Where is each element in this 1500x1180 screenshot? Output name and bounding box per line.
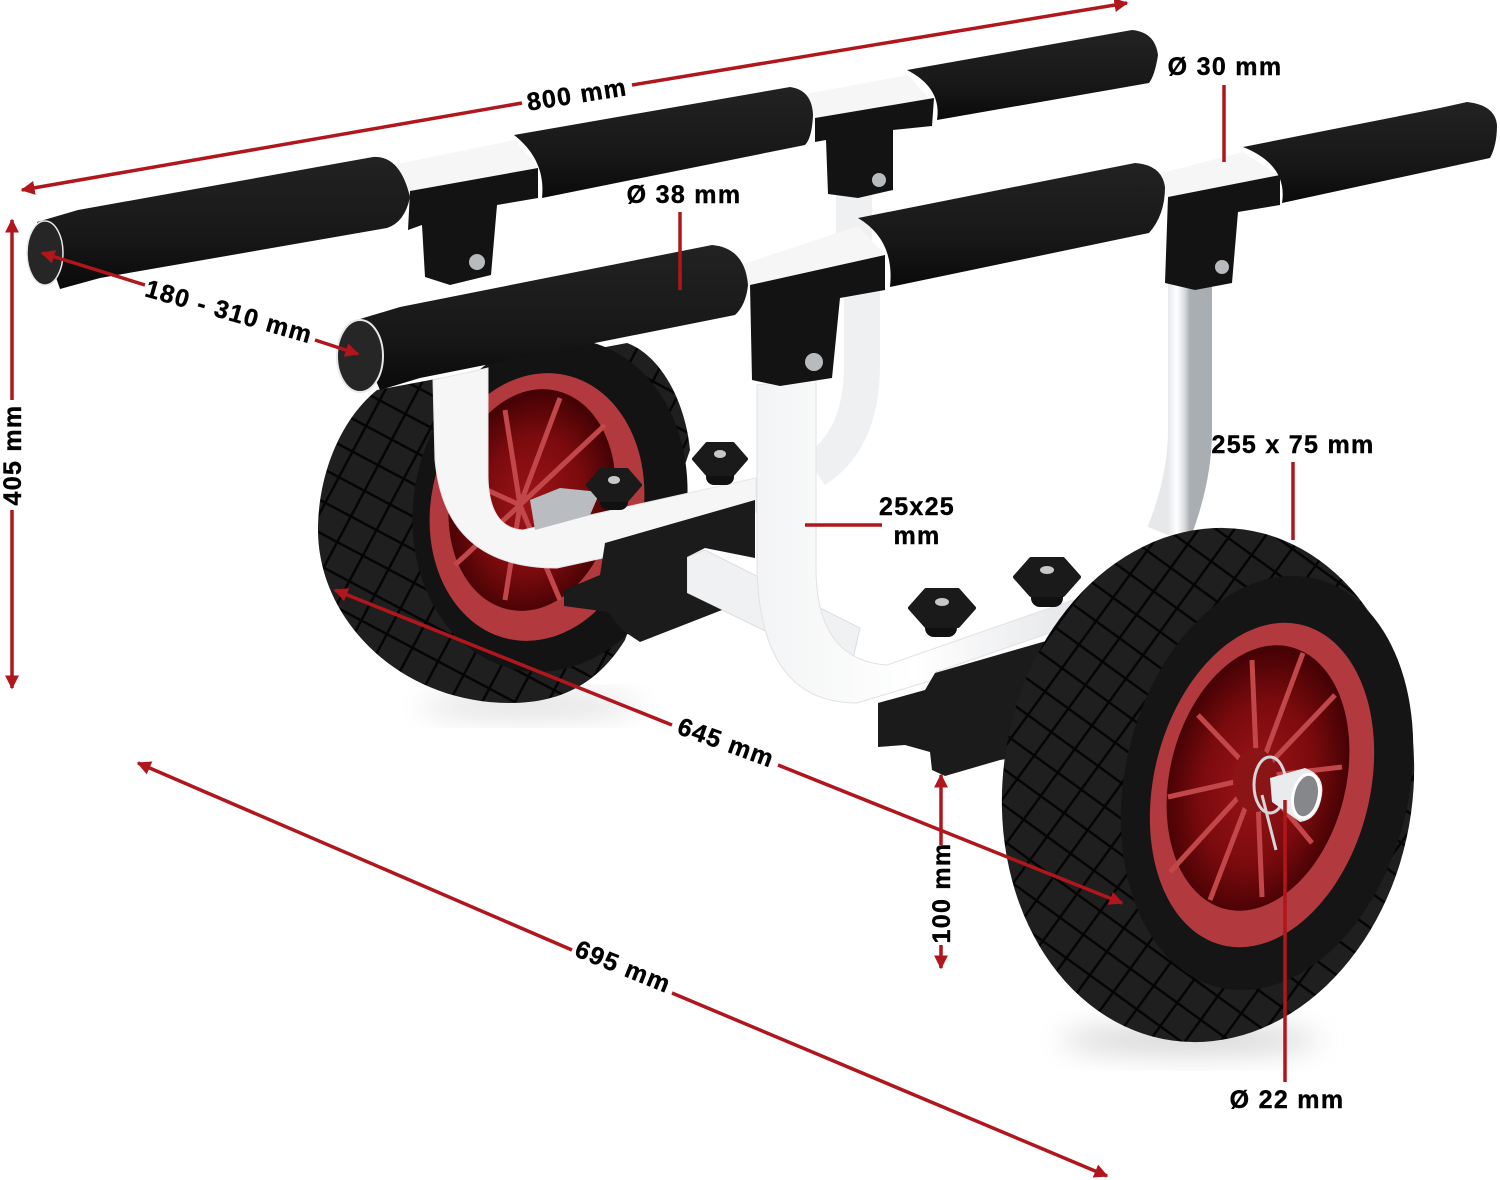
rear bar foam grip right: [907, 30, 1158, 120]
label: 180 - 310 mm: [142, 275, 316, 349]
label: 695 mm: [571, 935, 675, 999]
arrow up: [939, 775, 943, 845]
arrow left: [335, 590, 672, 725]
front U tube: [757, 378, 1073, 703]
cotter pin: [1262, 795, 1276, 850]
knob head: [910, 590, 974, 626]
front right T connector: [1165, 175, 1280, 290]
label: 100 mm: [928, 843, 956, 943]
left black block: [564, 500, 755, 642]
dimension: 30 mm tube: [1168, 53, 1282, 162]
arrow down: [939, 945, 943, 968]
tyre sidewall: [1081, 546, 1453, 1020]
dimension: 180-310 mm: [42, 253, 358, 354]
arrow right: [778, 765, 1122, 903]
rear middle T connector: [815, 98, 934, 198]
label: 25x25: [879, 493, 955, 521]
leader: [678, 212, 682, 290]
leader: [1283, 800, 1287, 1082]
label: 255 x 75 mm: [1211, 431, 1375, 459]
screw: [872, 173, 886, 187]
rear bar tube left section: [392, 140, 540, 192]
axle: [1270, 768, 1322, 822]
ground shadow: front wheel: [1060, 1026, 1320, 1054]
front bar tube right section: [1150, 152, 1282, 200]
rear right U tube: [1168, 270, 1190, 535]
label: Ø 30 mm: [1168, 53, 1282, 81]
front end cap: [337, 320, 383, 392]
knob stem: [1031, 585, 1063, 607]
knob bolt: [714, 450, 726, 458]
knob 3: [910, 590, 974, 637]
tyre: [969, 501, 1447, 1069]
dimension: 25x25 mm: [805, 493, 955, 550]
arrow right: [672, 993, 1107, 1176]
rear bar tube right section: [800, 75, 934, 126]
front bar foam grip right: [1243, 102, 1497, 203]
front bar foam grip middle: [858, 163, 1165, 287]
knob stem: [925, 615, 957, 637]
screw: [469, 254, 485, 270]
connector body: [408, 168, 538, 285]
dimension: 38 mm foam: [627, 181, 741, 290]
knob stem: [600, 490, 628, 510]
leader: [1222, 85, 1226, 162]
connector body: [750, 255, 885, 386]
axle bore: [1289, 772, 1323, 820]
knob head: [588, 470, 640, 500]
left U tube and square tube: [433, 368, 756, 568]
front bar tube left section: [740, 226, 888, 290]
arrow left: [42, 253, 145, 285]
cross square tube: [687, 550, 860, 672]
rear bar foam grip left: [37, 157, 410, 289]
rear inner U tube: [815, 190, 862, 470]
rear bar: [27, 30, 1158, 289]
arrow right: [315, 340, 358, 354]
knob bolt: [935, 598, 949, 606]
arrow down: [10, 510, 14, 688]
knob 1: [588, 470, 640, 510]
leader: [1291, 462, 1295, 540]
knob head: [1015, 559, 1079, 595]
arrow up: [10, 220, 14, 400]
front bar foam grip left: [350, 245, 748, 390]
arrow left: [22, 103, 522, 190]
dimension: 695 mm: [138, 763, 1107, 1176]
rear end cap: [27, 221, 63, 285]
rear left T connector: [408, 168, 538, 285]
rim dish: [1140, 626, 1376, 930]
spokes: [1168, 653, 1342, 900]
front middle T connector: [750, 255, 885, 386]
label: Ø 22 mm: [1230, 1086, 1344, 1114]
dimension: 645 mm: [335, 590, 1122, 903]
screw: [805, 353, 823, 371]
bracket with axle pin: [530, 488, 600, 530]
red rim: [1117, 599, 1407, 971]
rear bar foam grip middle: [514, 87, 813, 198]
ground shadow: rear wheel: [420, 696, 640, 716]
hub: [1233, 748, 1277, 812]
screw: [1215, 260, 1229, 274]
label: 800 mm: [525, 73, 629, 117]
right black block: [878, 637, 1060, 776]
knob bolt: [608, 476, 620, 484]
dimension: 800 mm: [22, 3, 1127, 190]
arrow left: [138, 763, 572, 950]
label: Ø 38 mm: [627, 181, 741, 209]
leader: [805, 523, 882, 527]
front right wheel: [969, 501, 1453, 1069]
label second line: mm: [893, 522, 941, 550]
connector body: [815, 98, 934, 198]
front bar: [337, 102, 1497, 392]
knob 2: [694, 444, 746, 485]
knob 4: [1015, 559, 1079, 607]
knob stem: [706, 465, 734, 485]
connector body: [1165, 175, 1280, 290]
arrow right: [632, 3, 1127, 85]
axle collar: [1254, 757, 1286, 813]
rear left wheel: [318, 312, 718, 703]
knob bolt: [1040, 566, 1054, 574]
knob head: [694, 444, 746, 474]
label: 645 mm: [674, 713, 778, 773]
